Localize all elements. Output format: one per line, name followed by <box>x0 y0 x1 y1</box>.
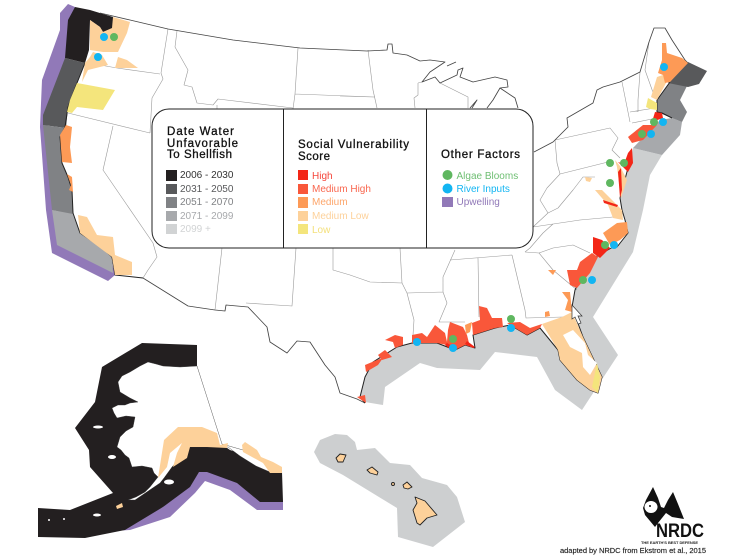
logo: NRDC: THE EARTH'S BEST DEFENSE <box>641 540 698 545</box>
legend: social vulnerability score: Low <box>312 225 331 236</box>
legend: other factors: Algae Blooms <box>456 171 518 182</box>
hawaii exposure band <box>314 434 465 547</box>
legend: date water unfavorable: To Shellfish <box>167 149 232 161</box>
alaska exposure band <box>38 343 283 538</box>
hawaiian islands <box>336 454 437 525</box>
algae bloom markers <box>110 33 658 343</box>
legend: date water unfavorable <box>166 126 238 235</box>
alaska upwelling band <box>110 470 283 531</box>
alaska medium-low vulnerability areas <box>116 427 282 509</box>
legend: social vulnerability score: Medium Low <box>312 211 369 222</box>
legend panel <box>152 109 533 248</box>
west coast exposure bands <box>43 7 113 273</box>
legend: date water unfavorable: 2006 - 2030 <box>180 170 234 181</box>
map: alaska <box>38 343 283 538</box>
legend: social vulnerability score <box>298 139 409 236</box>
legend: date water unfavorable: 2051 - 2070 <box>180 197 234 208</box>
social vulnerability areas: west coast <box>60 17 138 275</box>
social vulnerability areas: atlantic coast <box>548 43 688 288</box>
icon: trees and bear <box>643 487 684 527</box>
factor markers <box>94 33 668 352</box>
source credit: adapted by NRDC from Ekstrom et al., 2015 <box>560 546 706 555</box>
legend: other factors <box>441 149 520 208</box>
legend: date water unfavorable: Unfavorable <box>167 138 238 150</box>
legend: date water unfavorable: Date Water <box>167 126 234 138</box>
legend: date water unfavorable: 2099 + <box>180 224 211 235</box>
logo: NRDC: NRDC <box>656 520 704 542</box>
legend: social vulnerability score: High <box>312 171 333 182</box>
map: hawaii <box>314 434 465 547</box>
alaska land <box>112 362 276 500</box>
alaska islands <box>48 426 174 521</box>
legend: other factors: River Inputs <box>456 184 510 195</box>
social vulnerability areas: florida <box>542 292 602 393</box>
legend: date water unfavorable: 2031 - 2050 <box>180 184 234 195</box>
upwelling band: west coast <box>40 4 115 281</box>
state boundaries <box>60 13 688 403</box>
social vulnerability areas: gulf coast <box>357 306 542 403</box>
gulf and southeast exposure band <box>360 148 662 410</box>
legend: social vulnerability score: Score <box>298 151 330 163</box>
cursor arrow <box>572 305 582 324</box>
legend: other factors: Other Factors <box>441 149 520 161</box>
map: contiguous United States base <box>40 4 707 410</box>
legend: social vulnerability score: Medium High <box>312 184 371 195</box>
legend: date water unfavorable: 2071 - 2099 <box>180 211 234 222</box>
legend: social vulnerability score: Medium <box>312 197 348 208</box>
legend: social vulnerability score: Social Vulnerability <box>298 139 409 151</box>
legend: other factors: Upwelling <box>456 197 500 208</box>
logo: NRDC <box>641 487 704 545</box>
northeast exposure bands <box>633 62 707 155</box>
river input markers <box>94 33 668 352</box>
